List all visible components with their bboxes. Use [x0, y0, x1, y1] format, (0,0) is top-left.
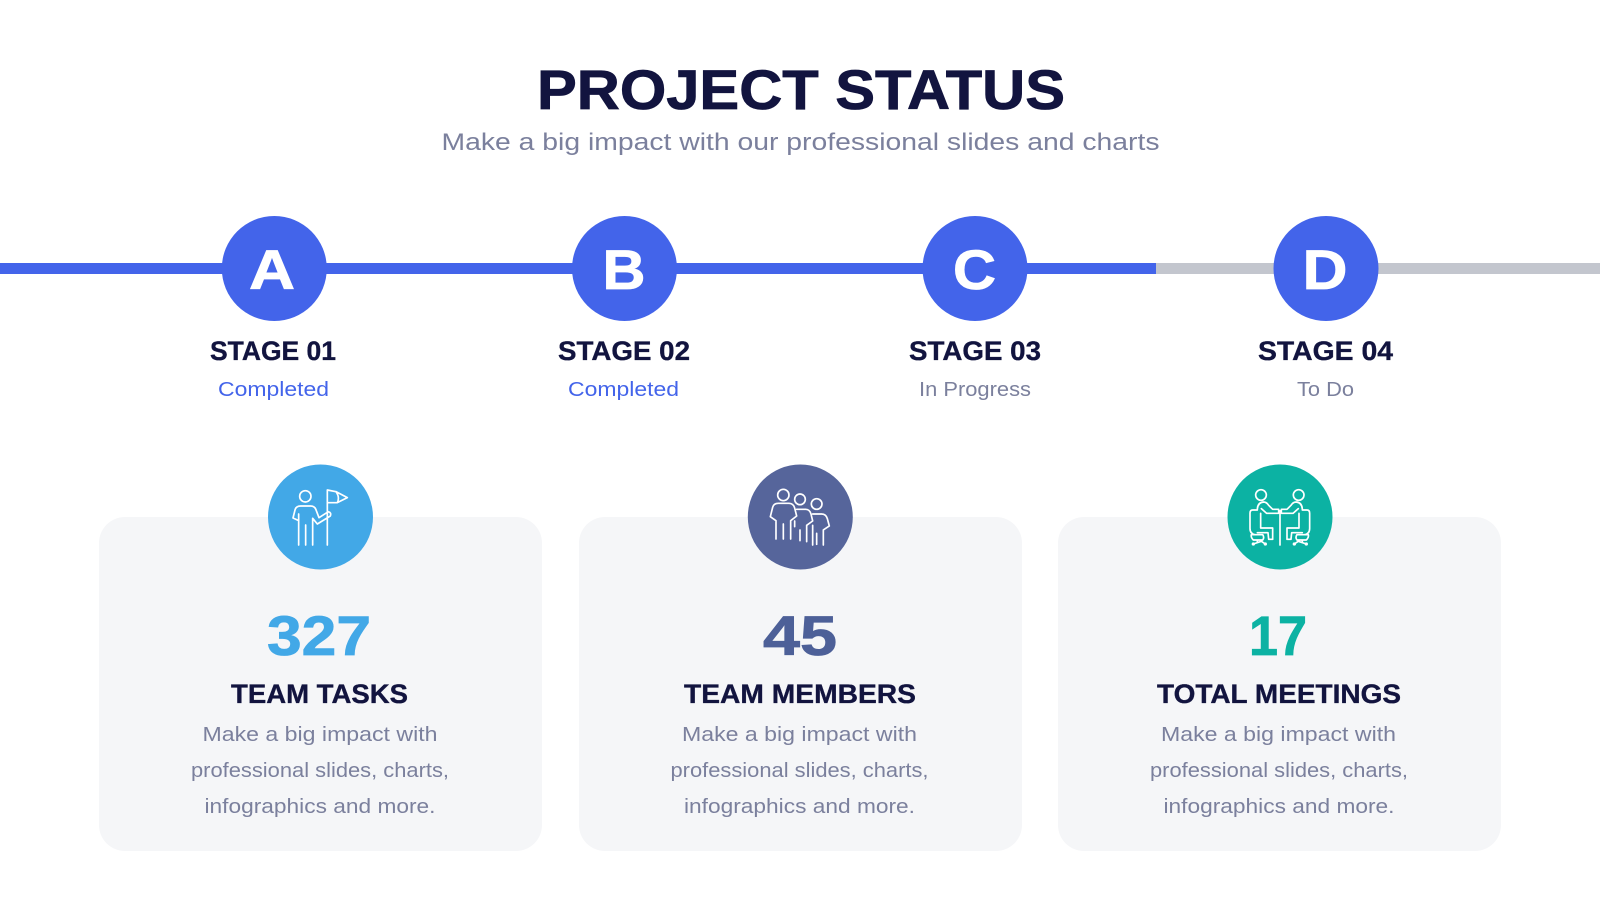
stage D marker [1274, 216, 1378, 321]
stage 04 label: STAGE 04 [1258, 336, 1393, 366]
heading: team members: TEAM MEMBERS [684, 679, 916, 709]
icon: three team members [748, 464, 853, 570]
panel: team tasks [99, 464, 542, 851]
stage 03 label [909, 336, 1041, 401]
heading: team tasks: TEAM TASKS [231, 679, 408, 709]
description: professional slides, charts, [1150, 759, 1408, 782]
stage 01 label: STAGE 01 [210, 336, 336, 366]
description: Make a big impact with [202, 723, 438, 746]
stage 01 label: Completed [218, 378, 329, 401]
stage 02 label: STAGE 02 [558, 336, 690, 366]
description: Make a big impact with [1161, 723, 1396, 746]
description [670, 723, 928, 818]
stage 04 label: To Do [1297, 378, 1354, 401]
stage 04 label [1258, 336, 1393, 401]
stage C marker [922, 216, 1028, 321]
stage B marker [572, 216, 677, 321]
panel: team members [579, 464, 1022, 851]
title: PROJECT STATUS [537, 58, 1065, 121]
value: 327: 327 [267, 604, 371, 667]
description: professional slides, charts, [191, 759, 449, 782]
icon: person with flag [268, 464, 373, 570]
description: infographics and more. [204, 795, 436, 818]
stage C marker: C [953, 238, 996, 301]
stage A marker [222, 216, 327, 321]
description [1150, 723, 1408, 818]
value: 17: 17 [1249, 604, 1307, 667]
stage 03 label: In Progress [919, 378, 1031, 401]
stage A marker: A [249, 238, 295, 301]
value: 45: 45 [763, 604, 837, 667]
stage B marker: B [602, 238, 646, 301]
stage 01 label [210, 336, 336, 401]
description: Make a big impact with [682, 723, 917, 746]
description: infographics and more. [684, 795, 915, 818]
timeline [0, 216, 1600, 321]
description: professional slides, charts, [670, 759, 928, 782]
stage 02 label [558, 336, 690, 401]
description: infographics and more. [1164, 795, 1394, 818]
stage D marker: D [1302, 238, 1348, 301]
stage 03 label: STAGE 03 [909, 336, 1041, 366]
icon: two people meeting at table [1228, 464, 1332, 570]
stage 02 label: Completed [568, 378, 679, 401]
subtitle: Make a big impact with our professional slides and charts [442, 129, 1160, 156]
panel: total meetings [1058, 464, 1501, 851]
heading: total meetings: TOTAL MEETINGS [1157, 679, 1401, 709]
description [191, 723, 449, 818]
